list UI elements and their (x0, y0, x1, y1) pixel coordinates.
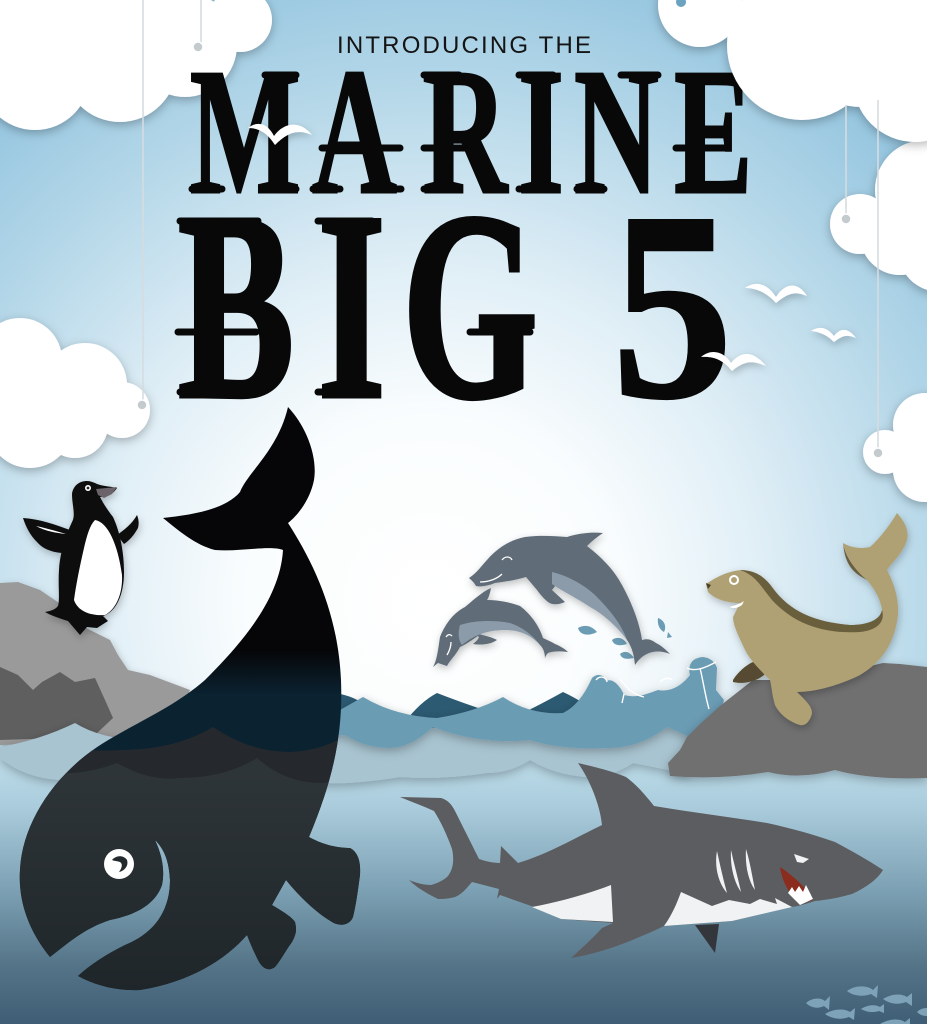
seal (706, 513, 908, 725)
cloud: top left (0, 0, 272, 130)
cloud: right lower (863, 393, 927, 502)
small dolphin (433, 588, 568, 667)
shark (400, 763, 883, 958)
seal rear flipper (733, 662, 766, 683)
middle wave with splash (200, 657, 724, 748)
school of fish (806, 985, 927, 1024)
seal face details (730, 576, 738, 584)
sky background (0, 0, 927, 800)
heading: marine: MARINE (190, 32, 752, 231)
whale upper body (20, 407, 360, 990)
hanging strings with beads (137, 0, 883, 458)
penguin beak and eye (96, 487, 117, 498)
right rock (668, 663, 927, 778)
shark lower fin (695, 924, 719, 953)
shark eye (794, 854, 809, 863)
shark belly (532, 885, 792, 926)
intro line: INTRODUCING THE (337, 32, 591, 59)
penguin belly (74, 520, 122, 615)
dolphins (433, 533, 670, 667)
cloud: top right (658, 0, 927, 142)
splash droplets and highlights (578, 618, 716, 709)
seal body (706, 513, 908, 725)
penguin body (45, 481, 124, 635)
seal back stripe (740, 543, 883, 632)
seagulls (248, 124, 856, 371)
shark mouth (780, 867, 813, 904)
heading: big: BIG (178, 158, 538, 454)
back wave (340, 692, 605, 735)
sea water background (0, 755, 927, 1024)
whale submerged body (20, 727, 360, 990)
title group (178, 32, 752, 455)
left rock (0, 582, 190, 745)
penguin (23, 481, 139, 635)
shark teeth (788, 885, 813, 905)
cloud: left (0, 318, 150, 468)
shark body (400, 763, 883, 958)
heading: 5: 5 (612, 158, 733, 455)
big dolphin (469, 533, 670, 665)
penguin flippers (23, 515, 139, 553)
cloud: right middle (830, 140, 927, 292)
shark gills (716, 849, 755, 893)
whale eye (104, 849, 134, 879)
front wave (0, 715, 690, 783)
whale (0, 407, 360, 1000)
